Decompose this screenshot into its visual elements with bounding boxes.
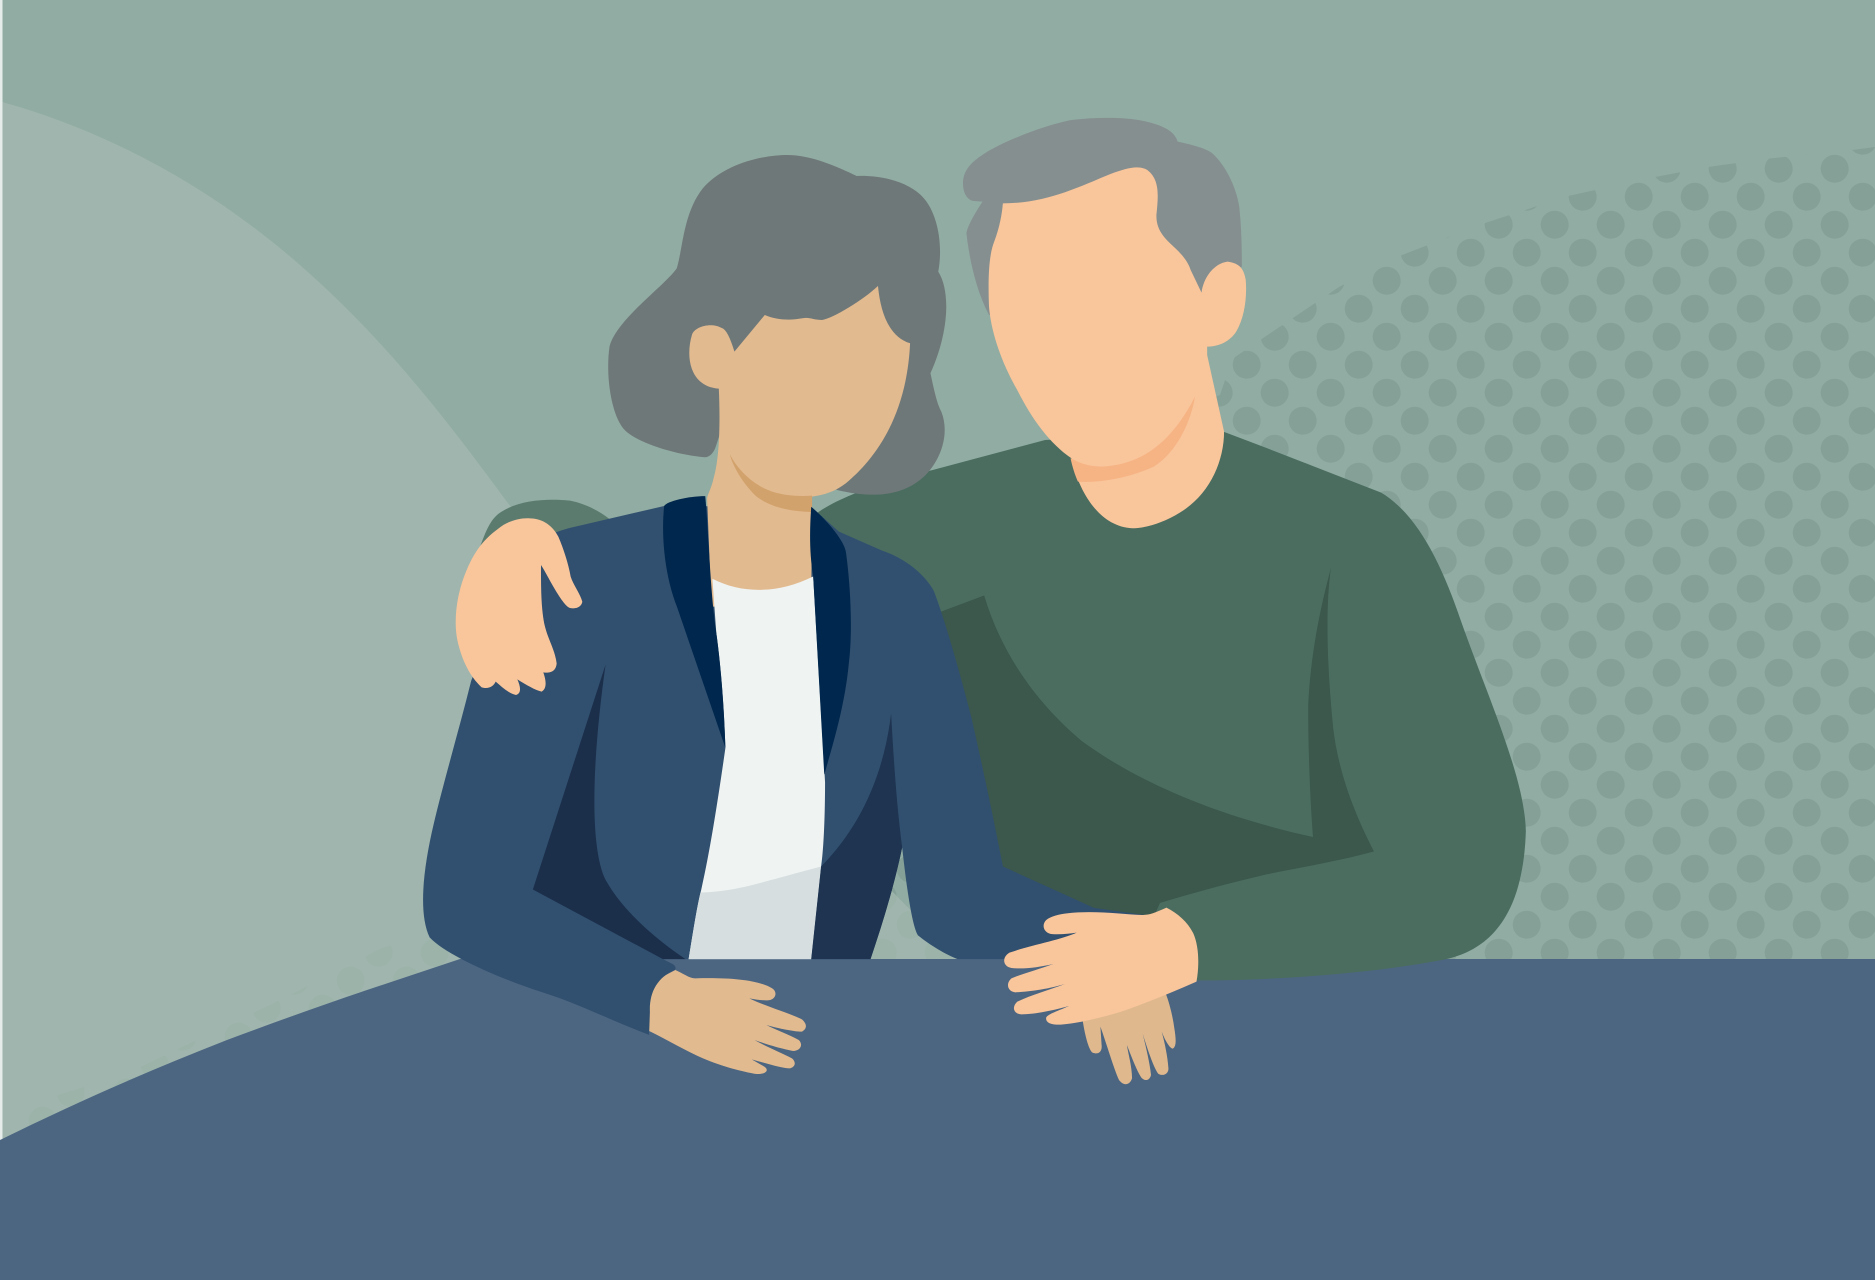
- man: shirt with shadow: [816, 432, 1526, 981]
- man: hand on table: [1004, 908, 1198, 1025]
- woman: hair: [608, 155, 946, 495]
- man: arm behind woman's shoulder: [478, 500, 610, 580]
- woman: hand on table: [644, 970, 806, 1074]
- blazer shadow right: [811, 713, 902, 959]
- woman: hand under man's hand: [1083, 993, 1176, 1084]
- man: face, neck and ear: [989, 167, 1246, 528]
- man: neck shadow: [1071, 397, 1195, 482]
- right lapel: [810, 507, 851, 775]
- shirt shadow: [927, 568, 1374, 930]
- table: [0, 959, 1875, 1280]
- woman: neck shadow: [730, 454, 812, 512]
- woman: blazer: [423, 506, 1146, 1035]
- man: hair: [963, 118, 1242, 315]
- light curved background shape: [2, 102, 1000, 1280]
- blazer shadow left: [533, 664, 685, 959]
- woman: face and neck: [689, 286, 910, 607]
- blouse: [689, 576, 825, 959]
- blouse shadow: [689, 867, 821, 959]
- background dot pattern: [892, 147, 1875, 959]
- man: hand on woman's shoulder: [456, 518, 582, 695]
- shirt body and sleeve: [816, 432, 1526, 981]
- woman: jacket details: [533, 496, 902, 959]
- left edge strip: [0, 0, 2, 1145]
- left lapel: [663, 496, 725, 748]
